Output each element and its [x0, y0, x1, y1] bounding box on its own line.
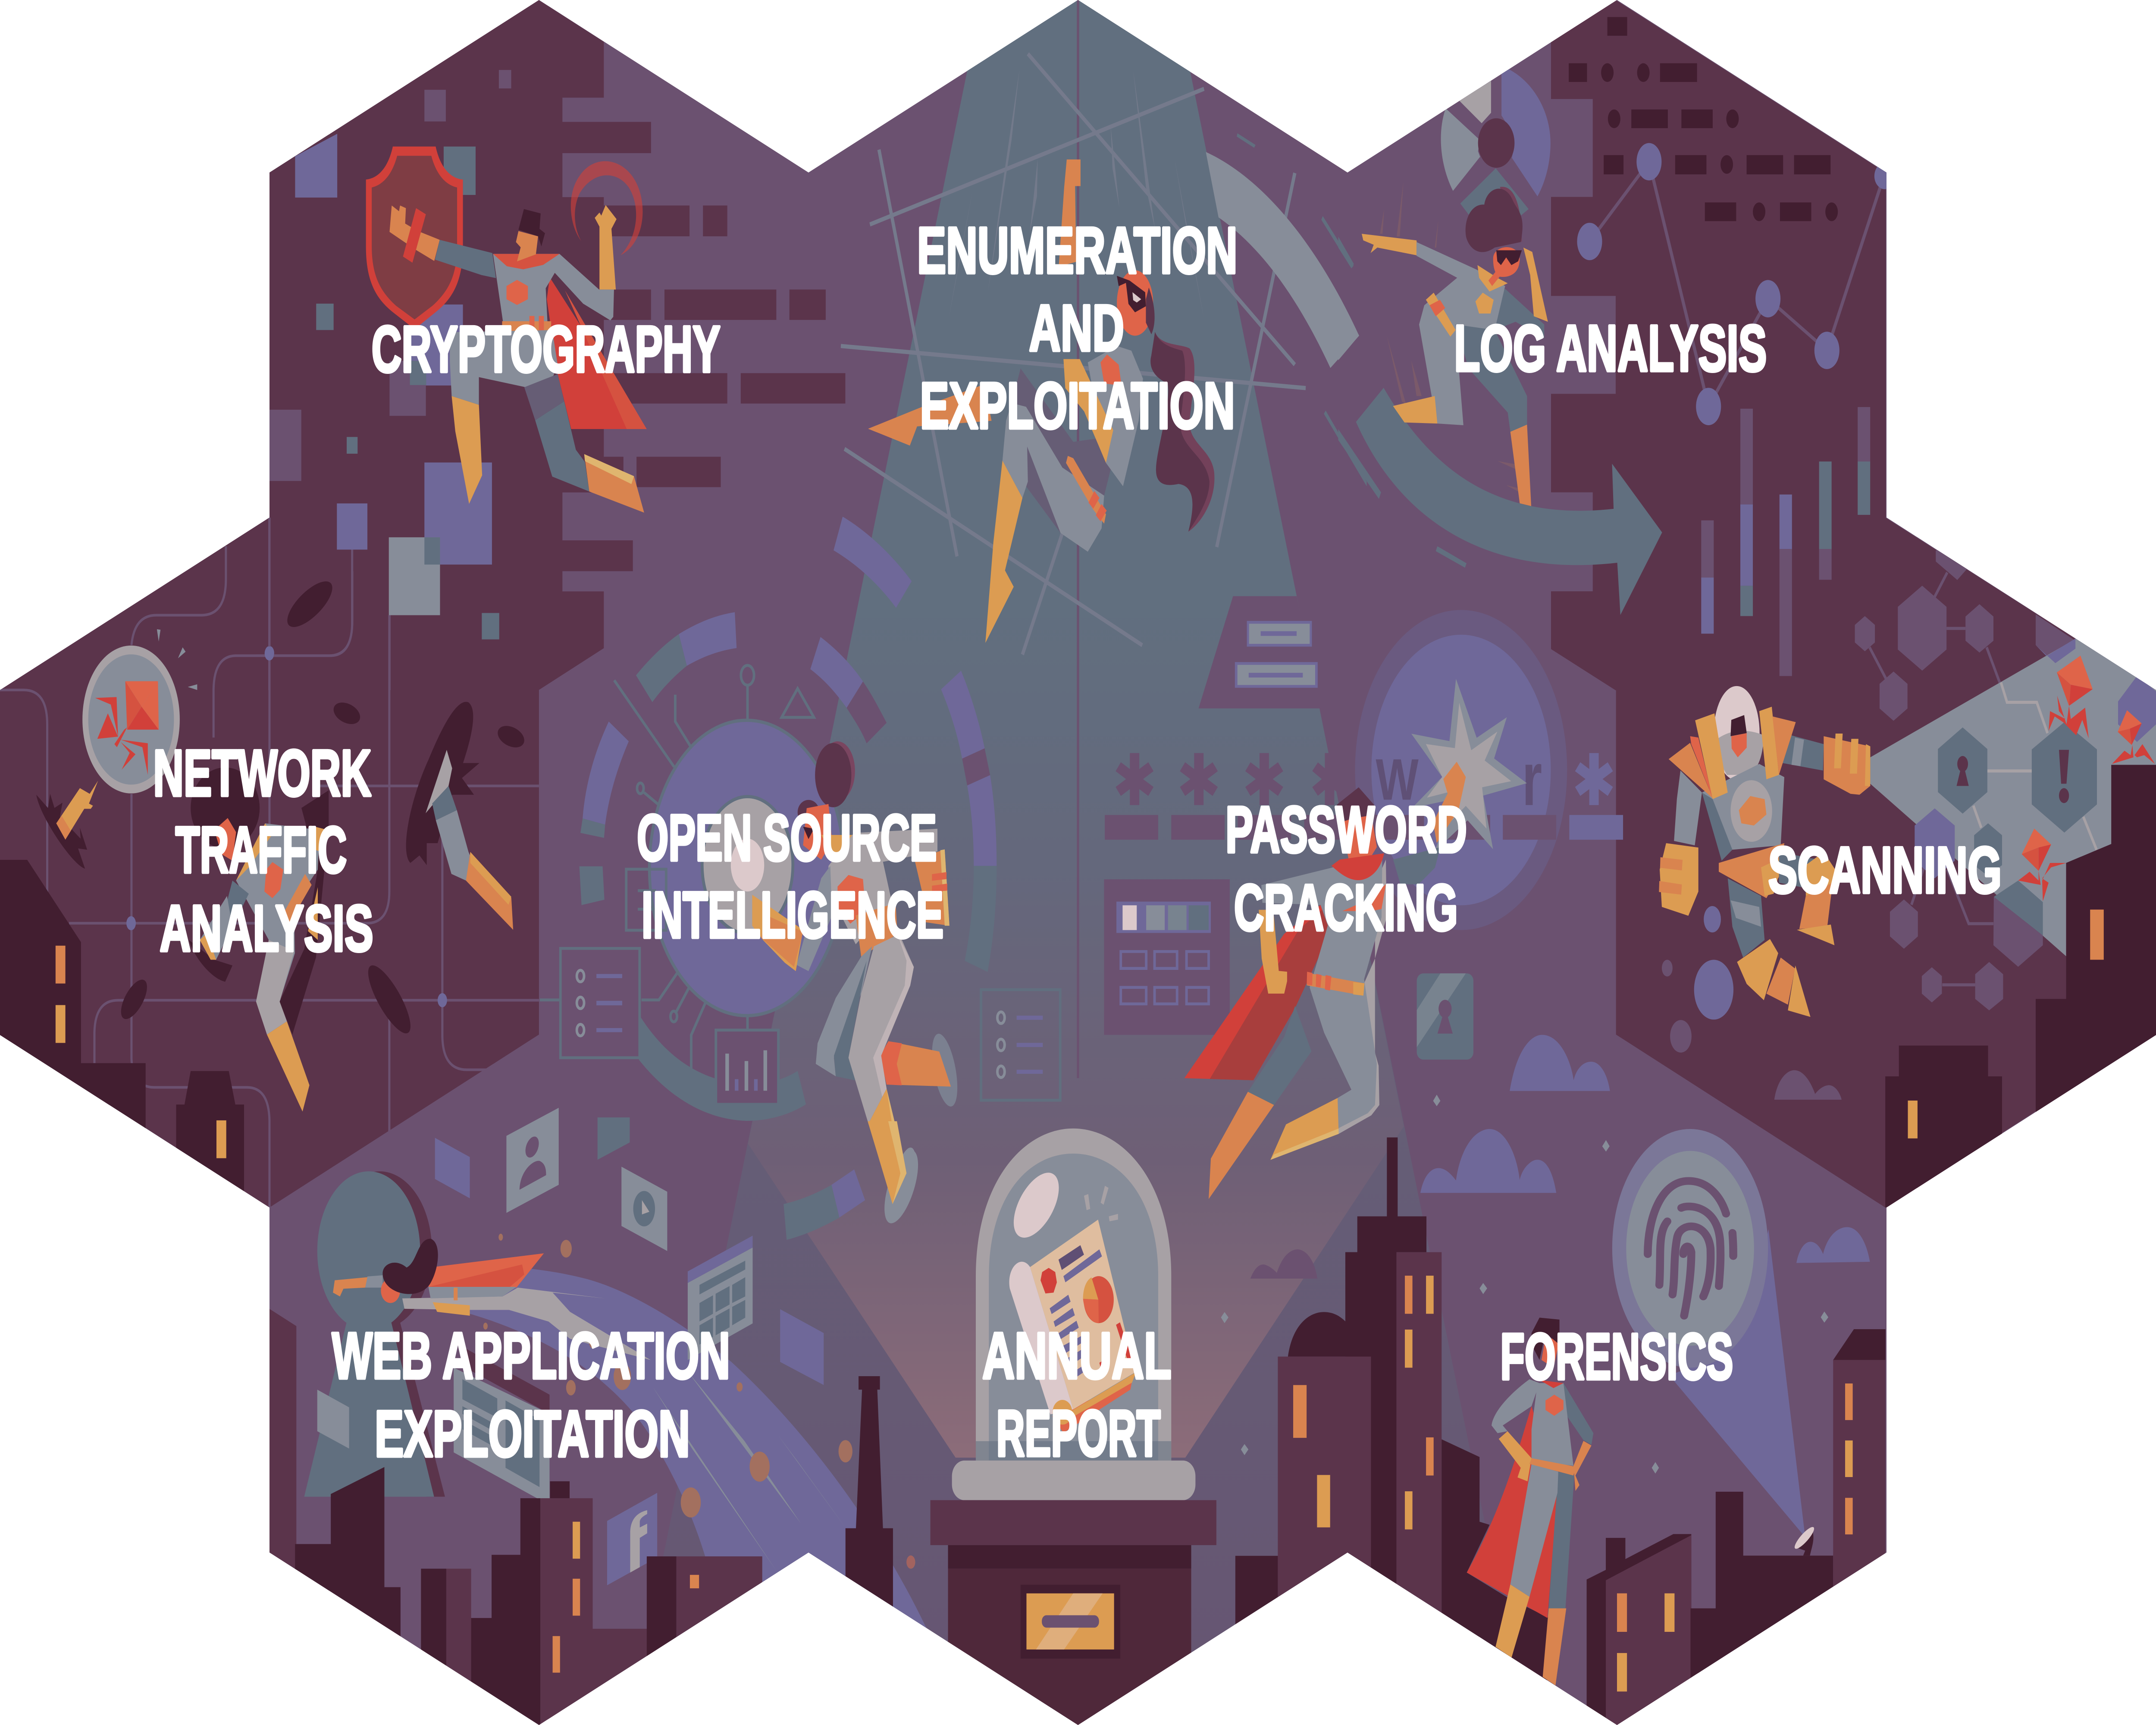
pedestal: [931, 1461, 1216, 1725]
heading: password cracking: PASSWORD: [1225, 793, 1467, 866]
icon: radial wheel: [1441, 66, 1551, 220]
hero: log analyst: [1362, 182, 1548, 506]
icon: fingerprint: [1648, 1181, 1733, 1316]
heading: network traffic analysis: TRAFFIC: [175, 813, 347, 887]
panel: web application exploitation: [270, 1108, 971, 1725]
heading: enumeration and exploitation: AND: [1029, 292, 1124, 365]
heading: open source intelligence: OPEN SOURCE: [637, 801, 937, 875]
icon: keycard lock: [1417, 973, 1473, 1060]
buildings: network skyline: [0, 860, 244, 1208]
hero: web flyer: [333, 1239, 544, 1316]
panel: checklist right: [981, 990, 1060, 1100]
icon: facebook card: [607, 1493, 657, 1585]
decor: floating squares: [270, 70, 511, 640]
hero boot: osint lower foot: [868, 1121, 925, 1226]
spotlight: central beam: [629, 0, 1526, 1725]
heading: annual report: ANNUAL: [982, 1319, 1172, 1393]
hero: armoured scanner: [1659, 686, 1870, 1017]
icon: searchlight: [1792, 1525, 1817, 1556]
bar chart: mini chart panel: [716, 1030, 778, 1104]
panel: enumeration and exploitation: [834, 54, 1367, 709]
panel: scanning background: [1616, 518, 2156, 1208]
icon: red shield: [366, 147, 463, 329]
hero: rope climber: [868, 160, 1214, 643]
panel: network traffic analysis background: [0, 518, 539, 1208]
row: password asterisks and field bars: r: [1522, 737, 1542, 822]
icon: magnifier with virus: [56, 629, 197, 840]
decor: web strands: [841, 54, 1306, 655]
comet trail: [402, 1266, 971, 1699]
decor: clouds and stars: [1420, 1129, 1870, 1474]
heading: annual report: REPORT: [996, 1397, 1160, 1470]
heading: web application exploitation: WEB APPLICATION: [332, 1319, 730, 1393]
arrow: curved slate arrow: [1356, 388, 1662, 615]
panel: checklist left: [561, 869, 666, 1058]
icon: alert hexagon: [2032, 722, 2097, 833]
icon: log morse blocks: [1569, 17, 1838, 221]
panel: cryptography background: [256, 0, 845, 690]
icon: glass dome: [976, 1129, 1171, 1461]
hero: network diver: [189, 750, 513, 1112]
buildings: forensics skyline left: [1345, 1138, 1549, 1725]
heading: scanning: SCANNING: [1768, 834, 2002, 907]
panel: annual report: [906, 1129, 1317, 1725]
icon: red crescent: [571, 161, 642, 255]
icon: data card: [454, 1349, 549, 1505]
line chart: log graph: [1577, 143, 1895, 425]
heading: network traffic analysis: NETWORK: [153, 737, 371, 810]
row: password asterisks and field bars: W: [1376, 747, 1419, 812]
buildings: forensics skyline right: [1587, 1329, 1886, 1725]
panel: device console: [1104, 879, 1230, 1035]
icons: floating web cards: [317, 1108, 824, 1449]
heading: network traffic analysis: ANALYSIS: [160, 892, 373, 965]
spotlight beam with fingerprint: [1612, 1129, 1805, 1537]
hero: caped detective: [1467, 1317, 1593, 1685]
panel: log analysis background: [1551, 0, 1895, 690]
hero: cracking jumper: [1185, 762, 1466, 1199]
heading: web application exploitation: EXPLOITATION: [375, 1397, 690, 1471]
buildings: web skyline: [295, 1376, 893, 1725]
icon: target disc: [649, 720, 844, 1016]
panel: password cracking: [1104, 610, 1623, 1199]
panel: log analysis hero and arrow: [1338, 66, 1662, 615]
buildings: annual right skyline: [1235, 1217, 1371, 1725]
beam: scanning light cone: [1870, 639, 2156, 956]
icon: burst star: [1411, 679, 1527, 851]
icon: browser table: [688, 1236, 752, 1360]
heading: log analysis: LOG ANALYSIS: [1454, 312, 1767, 385]
ring: lower arc piece: [783, 1170, 865, 1240]
decor: stars and dim cloud: [906, 1249, 1317, 1568]
icon: giant keyhole: [304, 1171, 445, 1497]
row: password asterisks and field bars: [1105, 737, 1623, 840]
ring: segmented arcs: [580, 612, 997, 1121]
icon: report scroll: [1009, 1220, 1136, 1433]
decor: clouds: [1420, 1035, 1610, 1193]
diagram: circuit lines: [540, 665, 814, 1070]
heading: enumeration and exploitation: ENUMERATION: [917, 214, 1238, 287]
icons: red virus kites: [2018, 656, 2155, 901]
heading: password cracking: CRACKING: [1234, 871, 1458, 944]
heading: enumeration and exploitation: EXPLOITATION: [920, 369, 1235, 442]
heading: forensics: FORENSICS: [1500, 1320, 1733, 1393]
hero: floating researcher: [752, 741, 962, 1223]
heading: open source intelligence: INTELLIGENCE: [642, 878, 943, 952]
buildings: scanning skyline: [1885, 765, 2156, 1208]
panel: open source intelligence: [540, 612, 1060, 1223]
icon: glow disc: [1355, 610, 1567, 930]
dots: ember particles: [483, 1234, 915, 1569]
icon: lock hexagon: [1938, 728, 1987, 814]
panel: small window bars: [1199, 596, 1320, 709]
panel: forensics: [1345, 1129, 1886, 1725]
bar chart: log bars: [1701, 407, 1870, 676]
heading: cryptography: CRYPTOGRAPHY: [372, 313, 721, 386]
hero: cryptography flyer: [389, 205, 647, 513]
